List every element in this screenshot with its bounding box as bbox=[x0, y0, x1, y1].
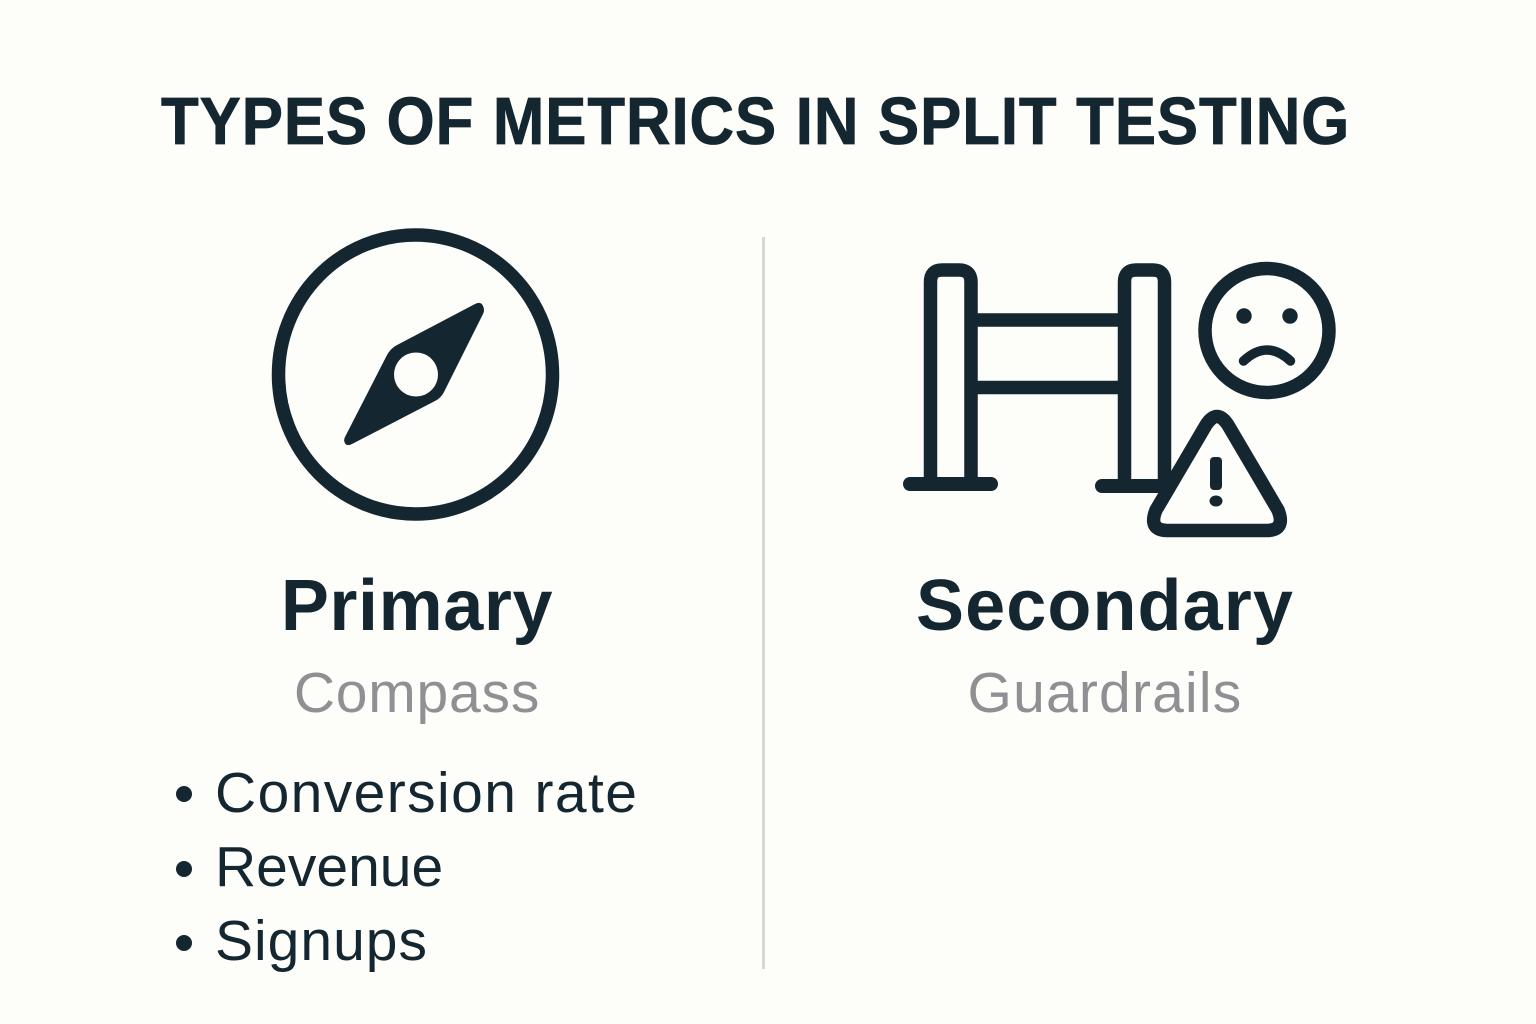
heading: Secondary: Secondary bbox=[916, 566, 1294, 646]
bullet list: primary metrics bbox=[176, 761, 638, 973]
bullet item: Revenue: Revenue bbox=[215, 835, 443, 899]
icon: compass bbox=[272, 228, 560, 521]
subheading: Compass: Compass bbox=[294, 661, 540, 725]
icon: guardrail with sad face and warning bbox=[903, 262, 1336, 538]
title: TYPES OF METRICS IN SPLIT TESTING bbox=[161, 84, 1350, 159]
bullet item: Conversion rate: Conversion rate bbox=[215, 761, 638, 825]
bullet item: Signups: Signups bbox=[215, 909, 428, 973]
subheading: Guardrails: Guardrails bbox=[968, 661, 1242, 725]
heading: Primary: Primary bbox=[281, 566, 553, 646]
